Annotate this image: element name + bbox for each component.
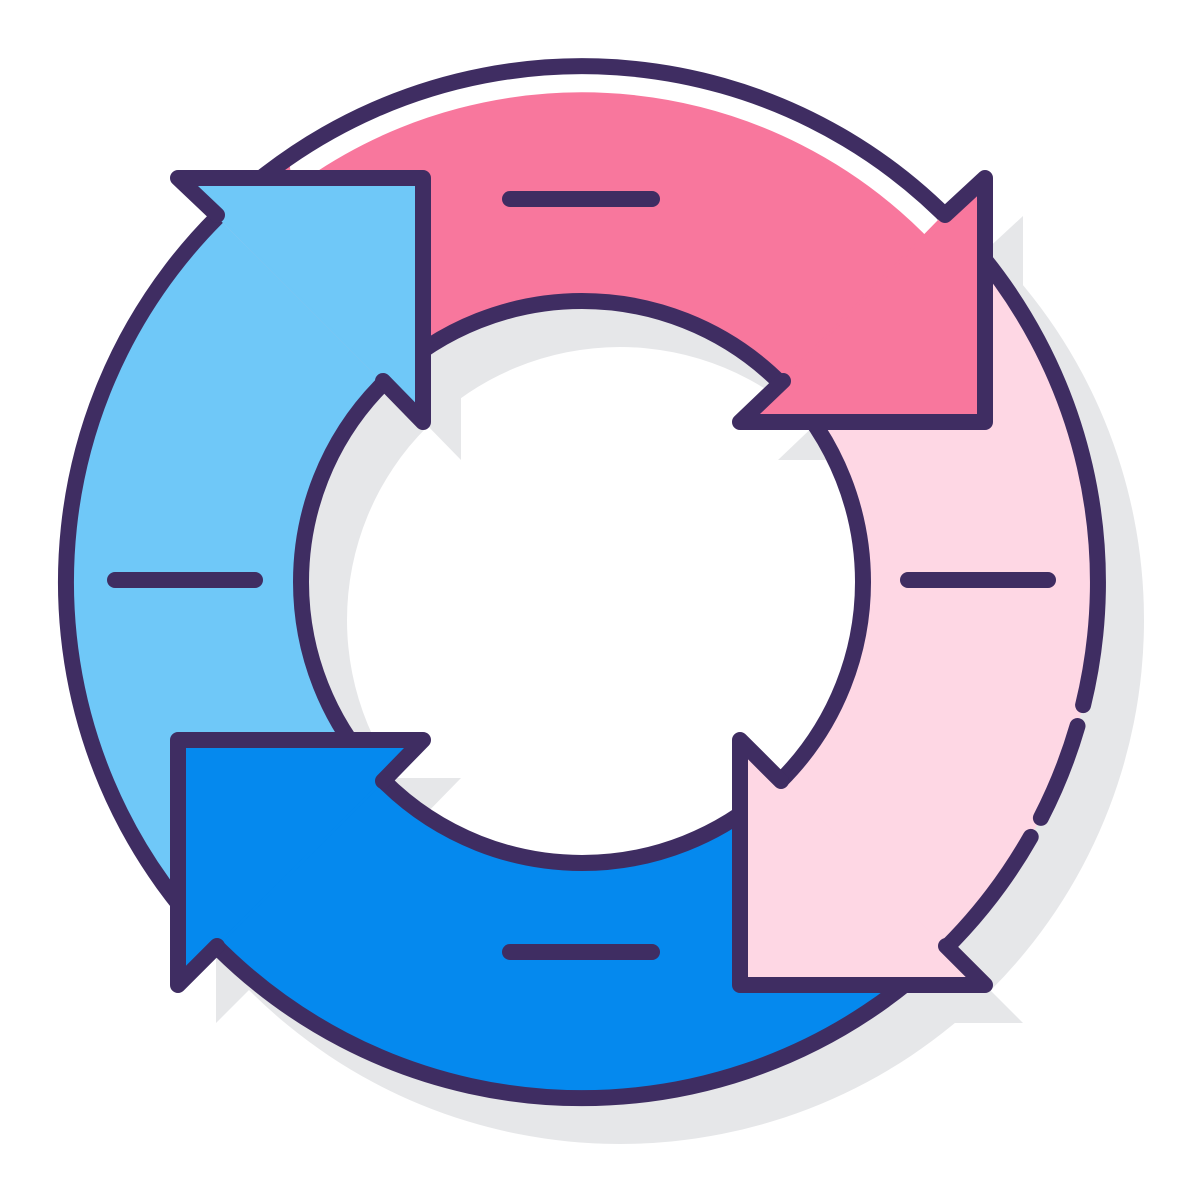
arrow: light pink right [740, 740, 985, 985]
arrow: blue bottom [178, 740, 423, 985]
ring outlines [66, 66, 1098, 1098]
arrow: pink top [740, 178, 985, 422]
shadow [96, 96, 1144, 1144]
highlight [302, 80, 942, 235]
ring segments [74, 92, 1090, 1090]
arrow: light blue left [178, 178, 423, 422]
dashes [115, 199, 1048, 952]
